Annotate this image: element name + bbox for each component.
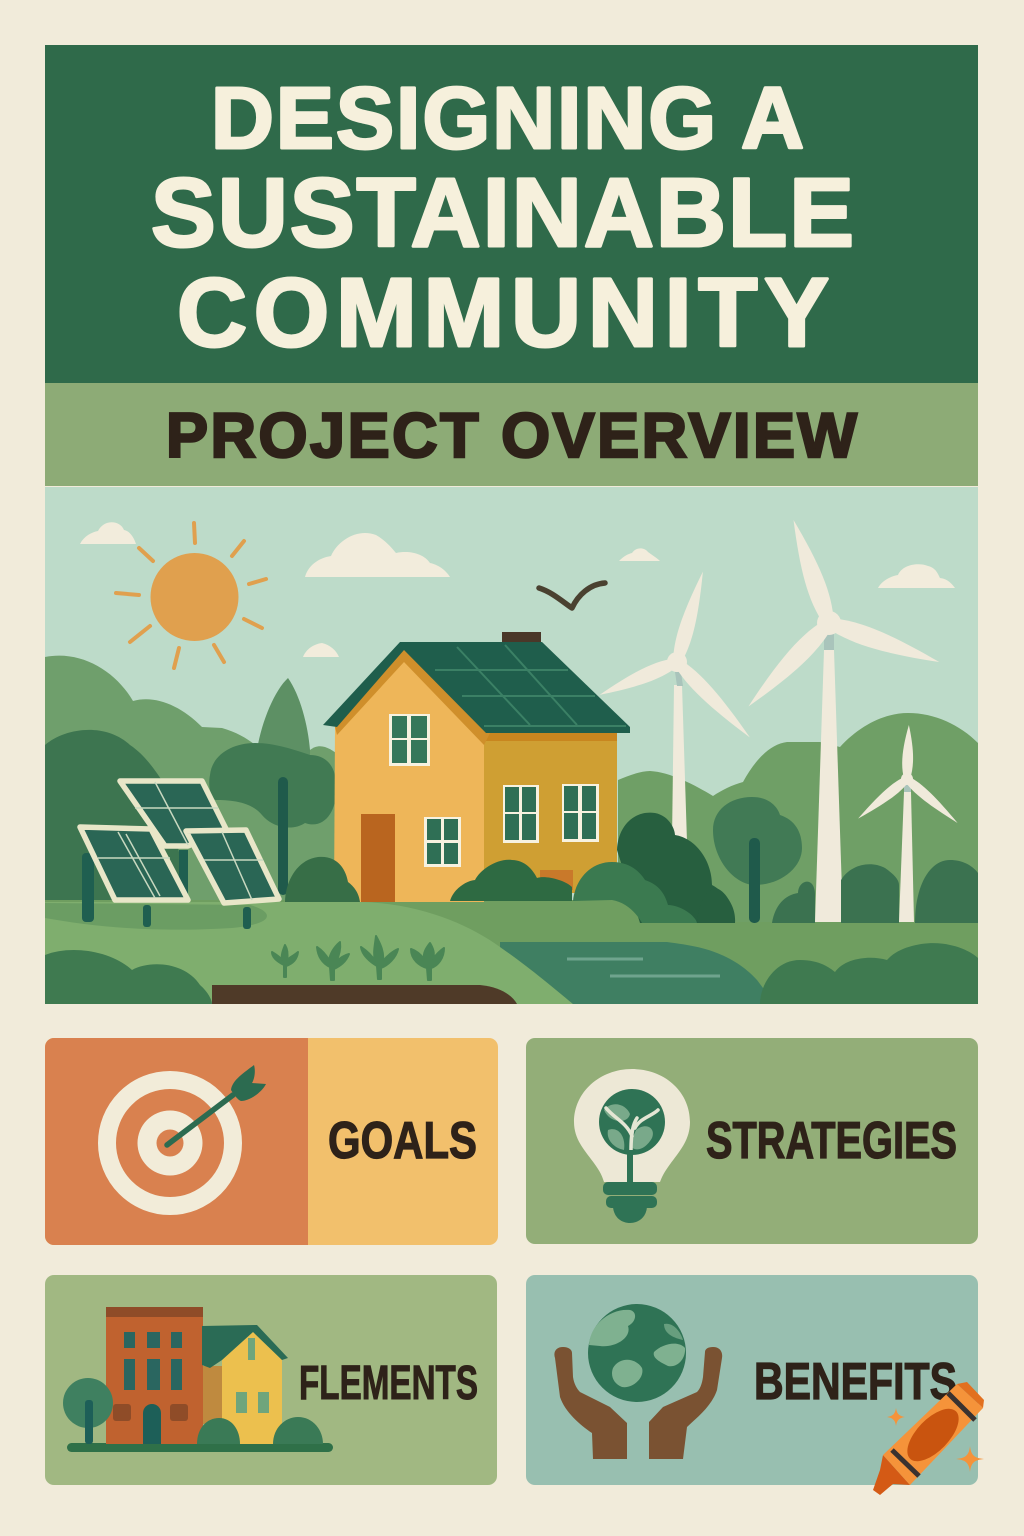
icon: sun xyxy=(116,523,266,668)
left wall with gable xyxy=(334,653,484,902)
clouds xyxy=(80,522,955,657)
panel: goals xyxy=(45,1038,498,1245)
title banner xyxy=(45,45,978,383)
background hills and trees left xyxy=(45,656,340,905)
title: DESIGNING A xyxy=(211,70,804,167)
right wall xyxy=(483,733,617,893)
pole xyxy=(278,777,288,895)
yellow house xyxy=(222,1332,282,1444)
window upper left xyxy=(389,714,430,766)
link section xyxy=(203,1366,223,1424)
bushes bottom left xyxy=(45,950,212,1004)
chimney xyxy=(502,632,541,644)
label: benefits: BENEFITS xyxy=(754,1353,957,1411)
panel: strategies xyxy=(526,1038,978,1244)
seedlings xyxy=(272,936,444,980)
bushes in front of house xyxy=(450,860,572,901)
house xyxy=(323,632,630,902)
background hills right xyxy=(618,713,978,925)
illustration: sustainable community scene xyxy=(45,487,978,1004)
icon: light bulb with tree xyxy=(574,1069,690,1223)
panel: benefits xyxy=(526,1275,978,1485)
title xyxy=(151,70,854,367)
door xyxy=(361,814,395,902)
solar panels xyxy=(80,781,279,929)
icon: target with arrow xyxy=(107,1065,266,1206)
brick building xyxy=(106,1307,203,1444)
tree xyxy=(63,1378,113,1428)
bushes behind right ground xyxy=(772,860,978,923)
turbine: tall centre xyxy=(742,517,942,922)
subtitle: PROJECT OVERVIEW xyxy=(166,401,858,471)
window right b xyxy=(562,784,599,842)
window lower left xyxy=(424,817,461,867)
title: COMMUNITY xyxy=(177,258,829,367)
label: elements: FLEMENTS xyxy=(299,1357,478,1410)
title: SUSTAINABLE xyxy=(151,158,854,267)
window right a xyxy=(503,785,539,843)
bushes right of house xyxy=(573,813,735,923)
bushes bottom right xyxy=(760,943,978,1004)
icon: crayon watermark xyxy=(873,1382,984,1495)
ground xyxy=(45,900,978,1004)
back door xyxy=(540,870,573,890)
roof xyxy=(323,642,630,733)
panel: elements xyxy=(45,1275,497,1485)
subtitle band xyxy=(45,383,978,486)
ground strip xyxy=(67,1443,333,1452)
soil bed xyxy=(212,985,517,1004)
label: goals: GOALS xyxy=(328,1112,477,1170)
sparkles xyxy=(887,1408,905,1426)
icon: buildings xyxy=(63,1307,333,1452)
icon: bird xyxy=(539,583,605,608)
icon: hands holding globe xyxy=(554,1304,722,1459)
turbine: medium left xyxy=(597,570,755,842)
pond xyxy=(500,942,775,1004)
tree right xyxy=(713,797,802,923)
shrubs xyxy=(197,1418,240,1444)
bush beside house xyxy=(285,857,360,902)
turbine: small right xyxy=(855,725,961,922)
